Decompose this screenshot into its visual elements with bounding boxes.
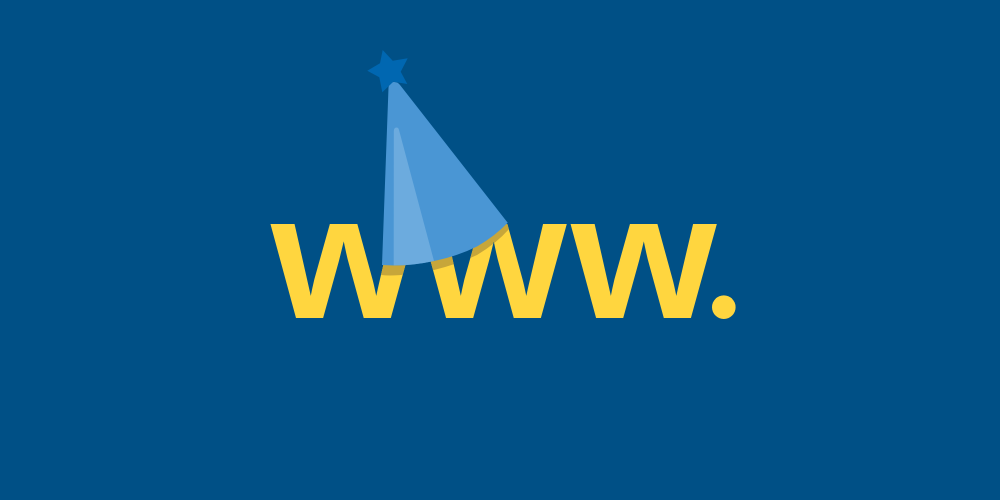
wordmark: www.: www [270, 157, 718, 356]
hat shadow on letters [381, 224, 509, 276]
star topper [367, 50, 408, 92]
party hat [367, 50, 508, 266]
illustration: www. with party hat [270, 50, 736, 319]
hat highlight [394, 128, 434, 265]
wordmark: www.: . [709, 216, 739, 339]
hat cone [382, 82, 508, 266]
period dot [712, 295, 736, 319]
